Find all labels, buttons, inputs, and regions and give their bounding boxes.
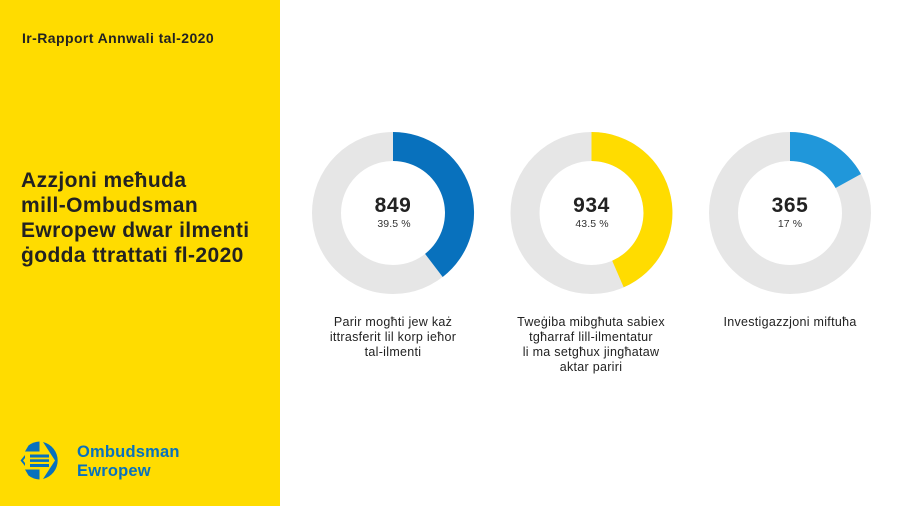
caption: [330, 315, 456, 359]
main heading: ġodda ttrattati fl-2020: [21, 244, 244, 267]
caption: tal-ilmenti: [365, 345, 421, 359]
percent 17 %: 17 %: [778, 218, 802, 230]
caption: Tweġiba mibgħuta sabiex: [517, 315, 665, 329]
panel: yellow sidebar: [0, 0, 280, 506]
logo wordmark: [77, 443, 180, 480]
panel: donut 849: [312, 132, 474, 359]
panel: donut 365: [709, 132, 871, 329]
caption: aktar pariri: [560, 360, 622, 374]
main heading: [21, 169, 250, 267]
panel: donut 934: [510, 132, 672, 374]
report label: Ir-Rapport Annwali tal-2020: [22, 30, 214, 46]
logo wordmark: Ombudsman: [77, 443, 180, 461]
value 365: 365: [772, 194, 808, 217]
caption: Parir mogħti jew każ: [334, 315, 452, 329]
logo wordmark: Ewropew: [77, 462, 151, 480]
caption: [517, 315, 665, 374]
donut chart: 39.5 %: [312, 132, 474, 294]
main heading: Azzjoni meħuda: [21, 169, 186, 192]
icon: Ombudsman logo: [20, 442, 58, 480]
value 849: 849: [375, 194, 411, 217]
main heading: mill-Ombudsman: [21, 194, 198, 217]
caption: Investigazzjoni miftuħa: [723, 315, 857, 329]
caption: li ma setgħux jingħataw: [523, 345, 659, 359]
value 934: 934: [573, 194, 610, 217]
caption: tgħarraf lill-ilmentatur: [529, 330, 653, 344]
donut chart: 43.5 %: [510, 132, 672, 294]
caption: ittrasferit lil korp ieħor: [330, 330, 456, 344]
main heading: Ewropew dwar ilmenti: [21, 219, 250, 242]
donut chart: 17 %: [709, 132, 871, 294]
percent 43.5 %: 43.5 %: [575, 218, 609, 230]
percent 39.5 %: 39.5 %: [377, 218, 411, 230]
